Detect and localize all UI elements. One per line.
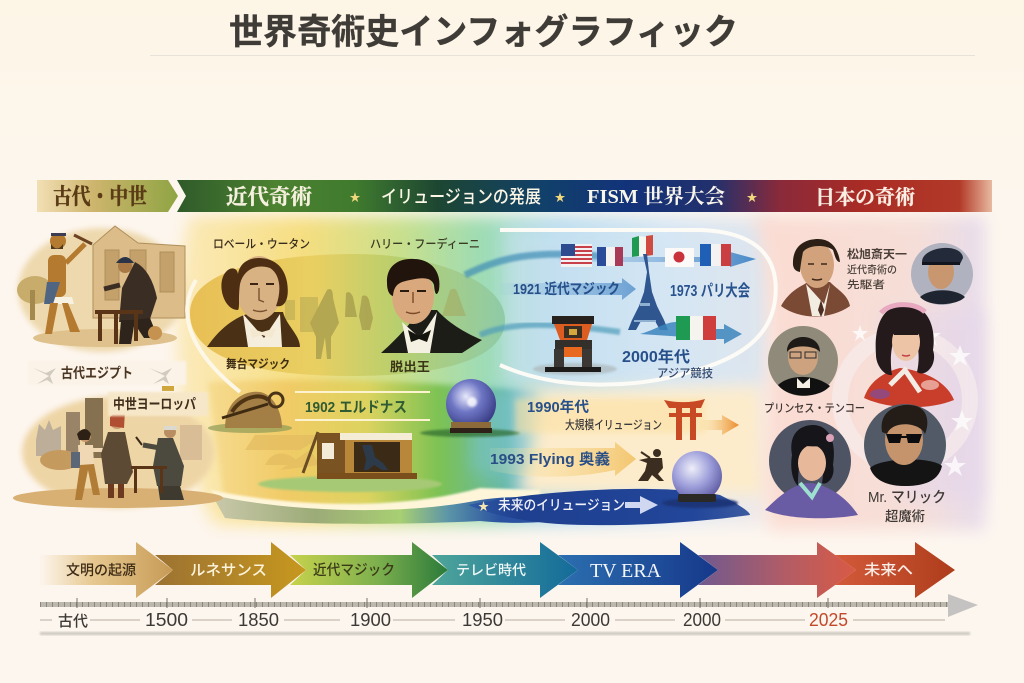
arrow: TV ERA xyxy=(558,542,718,598)
caption: Robert-Houdin name: ロベール・ウータン xyxy=(213,237,310,251)
header ribbon: eras: 近代奇術 xyxy=(226,185,312,209)
event: 1990s big illusion xyxy=(515,398,705,433)
event: 1990s big illusion: 1990年代 xyxy=(527,398,589,416)
flag: USA xyxy=(561,244,592,267)
event: 1902: 1902 エルドナス xyxy=(305,399,407,416)
timeline labels: 1950 xyxy=(462,610,503,630)
flow lines xyxy=(465,230,776,385)
timeline labels: 1900 xyxy=(350,610,391,630)
portrait: Shokyokusai Tenichi xyxy=(781,239,850,317)
timeline labels: 1500 xyxy=(145,610,188,630)
icon: magic device xyxy=(533,316,617,375)
icon: crystal ball future xyxy=(662,451,738,508)
panel: Japan background xyxy=(755,216,985,530)
header ribbon: eras: ★ xyxy=(746,192,758,204)
arrow: renaissance: ルネサンス xyxy=(190,562,267,579)
event: 1921: 1921 近代マジック xyxy=(513,281,620,298)
event: 1993 Flying: 1993 Flying 奥義 xyxy=(490,451,610,468)
figure: robed man xyxy=(101,410,133,498)
header ribbon: eras xyxy=(177,180,992,212)
portrait: woman in kimono xyxy=(765,420,858,518)
future illusion band: ★ xyxy=(478,501,489,513)
caption: Princess Tenko: プリンセス・テンコー xyxy=(764,402,865,415)
caption: Houdini name: ハリー・フーディーニ xyxy=(370,236,480,251)
caption: Mr. Maric xyxy=(868,489,946,524)
portrait: man with glasses xyxy=(768,326,838,396)
caption: escape king: 脱出王 xyxy=(390,360,430,374)
timeline shadow xyxy=(40,632,970,635)
portrait: Mr. Maric xyxy=(864,404,946,486)
flag: Japan xyxy=(665,248,694,267)
illustration: magic booth xyxy=(258,432,442,492)
era arrows xyxy=(40,542,955,598)
figure: child xyxy=(71,429,108,500)
portrait: man in cap xyxy=(911,243,973,305)
FISM flags row xyxy=(558,235,756,267)
figure: ancient man xyxy=(44,233,92,334)
header ribbon: ancient xyxy=(37,180,178,212)
arrow: TV era: テレビ時代 xyxy=(456,562,526,578)
caption: Mr. Maric: Mr. マリック xyxy=(868,489,946,506)
arrow: TV ERA: TV ERA xyxy=(590,560,662,582)
portrait: Princess Tenko xyxy=(864,305,954,407)
timeline labels: 2025 xyxy=(809,610,848,630)
illustration: medieval Europe scene xyxy=(13,392,223,508)
header ribbon: eras: ★ xyxy=(554,192,566,204)
label: ancient Egypt: 古代エジプト xyxy=(61,365,133,381)
building xyxy=(93,226,185,318)
figure: seated magician xyxy=(131,426,184,500)
header ribbon: ancient: 古代・中世 xyxy=(53,184,147,209)
caption: pioneer: 松旭斎天一 xyxy=(847,247,908,261)
event: 1973: 1973 パリ大会 xyxy=(670,282,750,300)
header ribbon: eras: ★ xyxy=(350,192,360,204)
illustration: medieval Europe scene: 中世ヨーロッパ xyxy=(113,396,196,412)
flag: Italy top xyxy=(632,235,653,257)
caption: pioneer: 近代奇術の xyxy=(847,263,897,276)
timeline labels: 1850 xyxy=(238,610,279,630)
arrow: civilization: 文明の起源 xyxy=(66,562,136,578)
arrow: renaissance xyxy=(155,542,306,598)
timeline ruler xyxy=(40,594,978,617)
icon: Eiffel tower xyxy=(628,254,668,330)
arrow: TV era xyxy=(432,542,578,598)
figure: man at table xyxy=(95,257,162,344)
timeline labels: 古代 xyxy=(58,613,88,630)
timeline labels xyxy=(40,610,945,630)
icon: torii gate and arrow xyxy=(664,399,739,440)
caption: stage magic: 舞台マジック xyxy=(226,356,290,371)
arrow: modern magic xyxy=(290,542,448,598)
arrow: civilization xyxy=(40,542,173,598)
timeline labels: 2000 xyxy=(683,610,721,630)
label: ancient Egypt xyxy=(28,361,186,391)
portrait: Robert-Houdin xyxy=(207,256,300,347)
arrow: future: 未来へ xyxy=(864,562,913,579)
silhouettes xyxy=(285,289,466,359)
header ribbon: eras: イリュージョンの発展 xyxy=(381,187,541,207)
future illusion band: 未来のイリュージョン xyxy=(498,497,625,513)
main gradient panel xyxy=(177,216,774,525)
header ribbon: eras: FISM 世界大会 xyxy=(587,184,725,208)
event: 2000s Asia xyxy=(622,347,713,380)
arrow: future xyxy=(835,542,955,598)
panel: portraits oval xyxy=(187,236,505,392)
event: 1993 Flying xyxy=(490,442,636,477)
event: 2000s Asia: アジア競技 xyxy=(657,366,713,380)
event: 1921 xyxy=(500,278,636,300)
event: 1990s big illusion: 大規模イリュージョン xyxy=(565,417,662,432)
arrow: contemporary xyxy=(698,542,856,598)
future illusion band xyxy=(468,489,750,525)
flag: France right xyxy=(700,244,731,266)
icon: running figure xyxy=(638,449,664,481)
event: 1902 xyxy=(295,392,430,420)
event: 2000s Asia: 2000年代 xyxy=(622,347,691,366)
caption: Mr. Maric: 超魔術 xyxy=(885,508,925,524)
portrait: Houdini xyxy=(381,259,482,353)
flag arrow: Italy xyxy=(640,316,742,344)
arrow: modern magic: 近代マジック xyxy=(313,562,395,579)
caption: pioneer xyxy=(847,247,908,291)
header ribbon: eras: 日本の奇術 xyxy=(815,186,915,209)
title: 世界奇術史インフォグラフィック xyxy=(229,13,738,52)
caption: pioneer: 先駆者 xyxy=(847,278,885,291)
flag: France xyxy=(597,247,623,266)
icon: rope and lock xyxy=(208,392,325,470)
icon: crystal ball xyxy=(420,379,520,437)
illustration: ancient Egypt scene xyxy=(17,226,186,352)
timeline labels: 2000 xyxy=(571,610,610,630)
